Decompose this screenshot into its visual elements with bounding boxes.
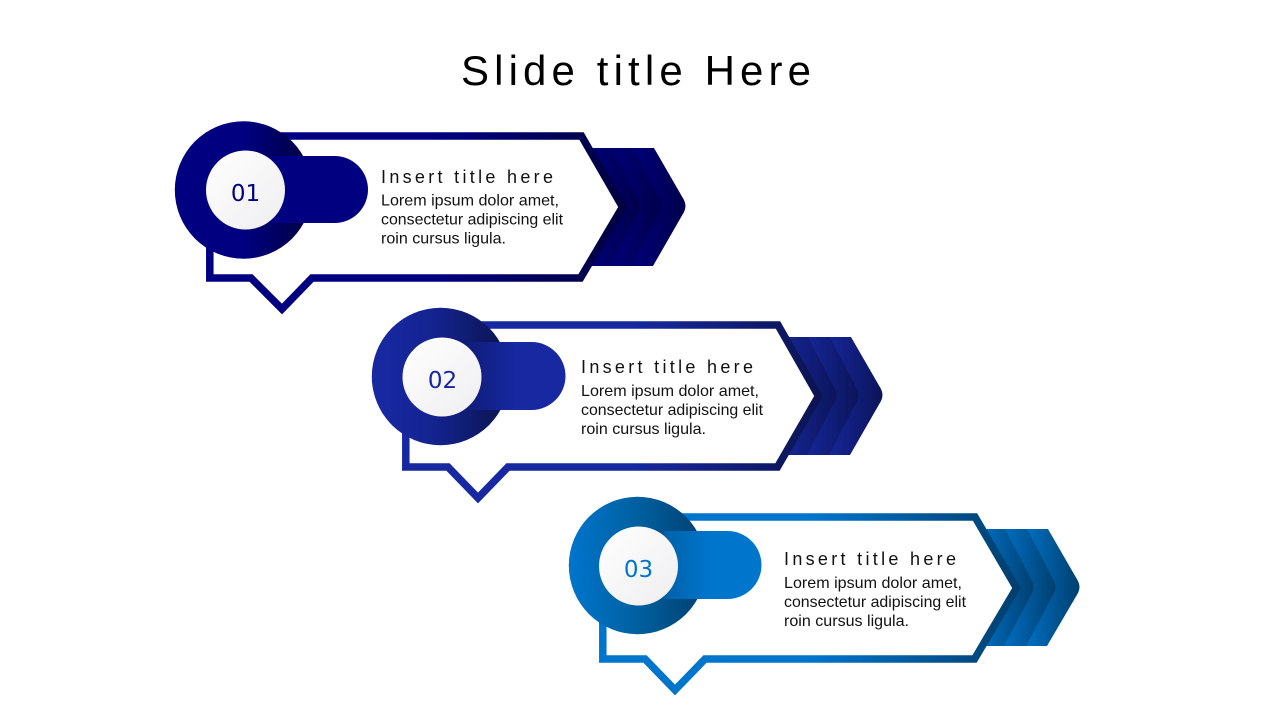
text block 03: Insert title here — [784, 549, 956, 569]
icon: chevron arrows 01 — [560, 148, 686, 266]
text block 03 — [784, 549, 967, 630]
text block 02 — [581, 357, 764, 438]
text block 01: Insert title here — [381, 167, 553, 187]
speech-bubble frame 03 — [603, 517, 1016, 690]
speech-bubble frame 02 — [406, 325, 818, 498]
text block 02: consectetur adipiscing elit — [581, 402, 764, 419]
speech-bubble frame 01 — [210, 136, 623, 309]
text block 02: Lorem ipsum dolor amet, — [581, 383, 759, 400]
text block 03: consectetur adipiscing elit — [784, 594, 967, 611]
pill 02 — [467, 342, 566, 410]
number 01: 01 — [231, 181, 260, 207]
number badge ring 02 — [372, 308, 509, 445]
white number disc 03 — [599, 526, 678, 606]
pill 01 — [270, 156, 368, 223]
text block 01: roin cursus ligula. — [381, 230, 506, 248]
number badge ring 01 — [175, 121, 312, 259]
text block 03: roin cursus ligula. — [784, 613, 909, 630]
icon: chevron arrows 02 — [757, 337, 882, 455]
panel: item 02 — [372, 308, 882, 498]
text block 02: Insert title here — [581, 357, 753, 377]
text block 01 — [381, 167, 564, 248]
text block 01: consectetur adipiscing elit — [381, 212, 564, 228]
white number disc 01 — [206, 150, 285, 230]
icon: chevron arrows 03 — [954, 529, 1080, 646]
pill 03 — [664, 531, 762, 599]
panel: item 01 — [175, 121, 686, 309]
text block 01: Lorem ipsum dolor amet, — [381, 192, 559, 210]
text block 02: roin cursus ligula. — [581, 421, 706, 438]
number 03: 03 — [624, 557, 653, 583]
title: Slide title Here — [461, 47, 811, 94]
panel: item 03 — [569, 497, 1080, 690]
number 02: 02 — [428, 368, 457, 394]
white number disc 02 — [402, 338, 482, 416]
text block 03: Lorem ipsum dolor amet, — [784, 575, 962, 592]
number badge ring 03 — [569, 497, 706, 634]
